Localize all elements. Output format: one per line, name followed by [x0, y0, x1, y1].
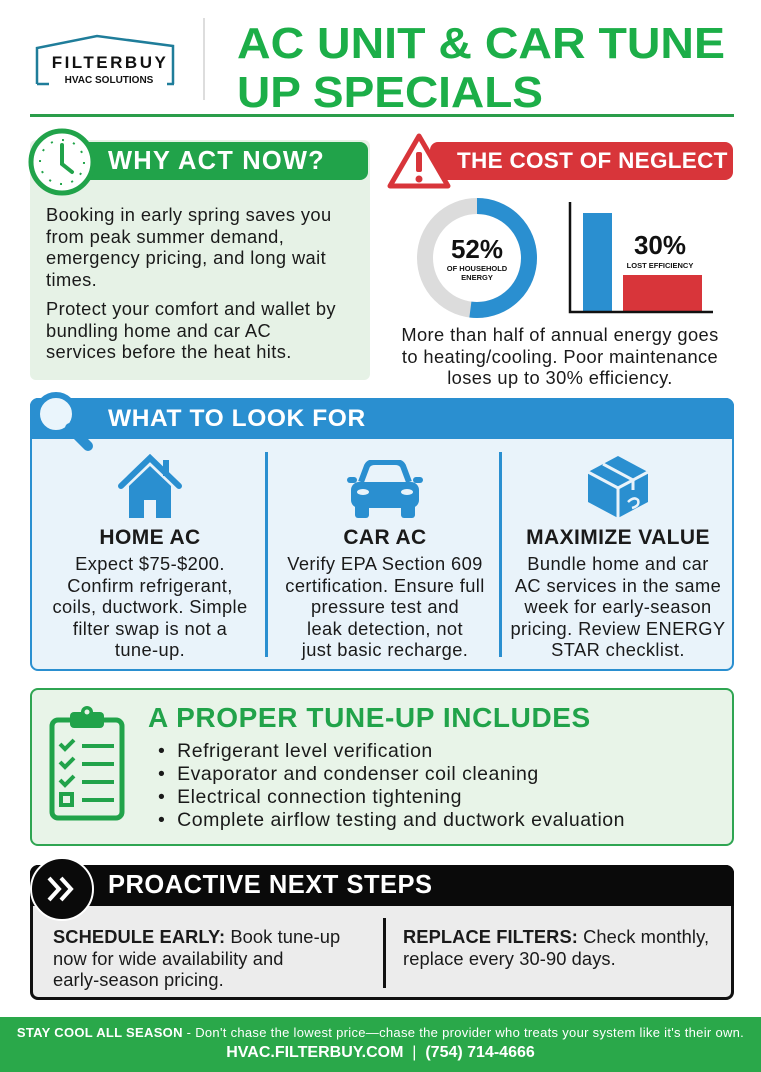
title: [237, 19, 725, 112]
column: maximize value: [510, 456, 726, 660]
text: schedule early: early-season pricing.: [53, 969, 224, 990]
text: why act now: emergency pricing, and long wait: [46, 247, 326, 268]
text: why act now: times. Protect your comfort and wallet by: [46, 268, 336, 319]
text: schedule early: SCHEDULE EARLY: Book tune-up: [53, 926, 340, 947]
text: neglect caption: [401, 324, 719, 388]
column: home ac: HOME AC: [99, 526, 201, 549]
icon: house: [118, 454, 182, 518]
text: neglect caption: loses up to 30% efficiency.: [447, 367, 673, 388]
text: schedule early: [53, 926, 340, 990]
donut chart: ENERGY: [461, 273, 493, 282]
list: tune-up items: • Evaporator and condenser coil cleaning: [158, 763, 539, 785]
header: what to look for: [30, 398, 734, 439]
text: why act now: [46, 204, 336, 362]
text: replace filters: replace every 30-90 days.: [403, 948, 616, 968]
panel: proper tune-up: [30, 688, 734, 846]
logo: [36, 34, 174, 86]
column: car ac: leak detection, not: [307, 618, 463, 638]
text: why act now: Booking in early spring saves you: [46, 204, 332, 225]
icon: car: [347, 460, 423, 518]
bar chart: [568, 202, 713, 314]
column: car ac: [285, 460, 485, 660]
title: AC UNIT & CAR TUNE: [237, 19, 725, 68]
donut chart: 52%: [451, 234, 503, 264]
column: maximize value: AC services in the same: [515, 574, 721, 596]
list: tune-up items: • Complete airflow testing and ductwork evaluation: [158, 809, 625, 831]
text: replace filters: [403, 926, 709, 969]
footer: STAY COOL ALL SEASON - Don't chase the lowest price—chase the provider who treats your system like it's their own.: [17, 1025, 744, 1040]
column: home ac: [52, 454, 248, 660]
text: why act now: services before the heat hits.: [46, 341, 292, 362]
column: home ac: coils, ductwork. Simple: [52, 596, 248, 617]
panel: what to look for: [30, 398, 734, 671]
column: maximize value: week for early-season: [524, 596, 712, 617]
footer: [0, 1017, 761, 1072]
footer: HVAC.FILTERBUY.COM | (754) 714-4666: [226, 1044, 535, 1061]
donut chart: OF HOUSEHOLD: [447, 264, 508, 273]
column: home ac: tune-up.: [115, 639, 185, 660]
panel: cost of neglect: [388, 134, 733, 388]
panel: next steps: [30, 865, 734, 1000]
icon: magnifier: [40, 392, 93, 451]
header: next steps: [30, 865, 734, 906]
icon: chevrons: [30, 859, 94, 921]
list: tune-up items: • Refrigerant level verification: [158, 740, 433, 762]
column: maximize value: Bundle home and car: [527, 553, 709, 574]
header: cost of neglect: THE COST OF NEGLECT: [457, 148, 728, 173]
list: tune-up items: [158, 740, 625, 831]
icon: clock: [28, 128, 90, 196]
column: car ac: certification. Ensure full: [285, 574, 485, 596]
header: why act now: WHY ACT NOW?: [108, 147, 325, 175]
column: car ac: pressure test and: [311, 596, 459, 617]
header: next steps: PROACTIVE NEXT STEPS: [108, 871, 433, 899]
column: maximize value: MAXIMIZE VALUE: [526, 526, 710, 549]
column: home ac: Confirm refrigerant,: [67, 574, 233, 596]
text: why act now: bundling home and car AC: [46, 320, 271, 340]
text: replace filters: REPLACE FILTERS: Check monthly,: [403, 926, 709, 947]
text: schedule early: now for wide availability and: [53, 948, 284, 968]
heading: tune-up: A PROPER TUNE-UP INCLUDES: [148, 702, 591, 733]
icon: clipboard: [50, 706, 124, 820]
icon: warning: [388, 134, 450, 188]
column: car ac: Verify EPA Section 609: [287, 553, 483, 574]
text: why act now: from peak summer demand,: [46, 226, 284, 246]
panel: why act now: [30, 140, 370, 380]
column: car ac: CAR AC: [343, 526, 427, 549]
column: home ac: filter swap is not a: [73, 618, 227, 638]
header: cost of neglect: [430, 142, 733, 180]
column: home ac: Expect $75-$200.: [75, 553, 225, 574]
header: why act now: [74, 142, 368, 180]
bar chart: 30%: [634, 230, 686, 260]
donut chart: [417, 198, 537, 318]
header: what to look for: WHAT TO LOOK FOR: [108, 405, 366, 432]
list: tune-up items: • Electrical connection tightening: [158, 786, 462, 808]
text: neglect caption: More than half of annual energy goes: [401, 324, 719, 345]
text: neglect caption: to heating/cooling. Poor maintenance: [402, 346, 718, 366]
column: maximize value: pricing. Review ENERGY: [510, 618, 726, 638]
column: maximize value: STAR checklist.: [551, 639, 685, 660]
logo: FILTERBUY: [52, 53, 168, 72]
column: car ac: just basic recharge.: [302, 639, 468, 660]
bar chart: LOST EFFICIENCY: [627, 261, 693, 270]
icon: box: [588, 456, 648, 518]
logo: HVAC SOLUTIONS: [65, 75, 154, 86]
